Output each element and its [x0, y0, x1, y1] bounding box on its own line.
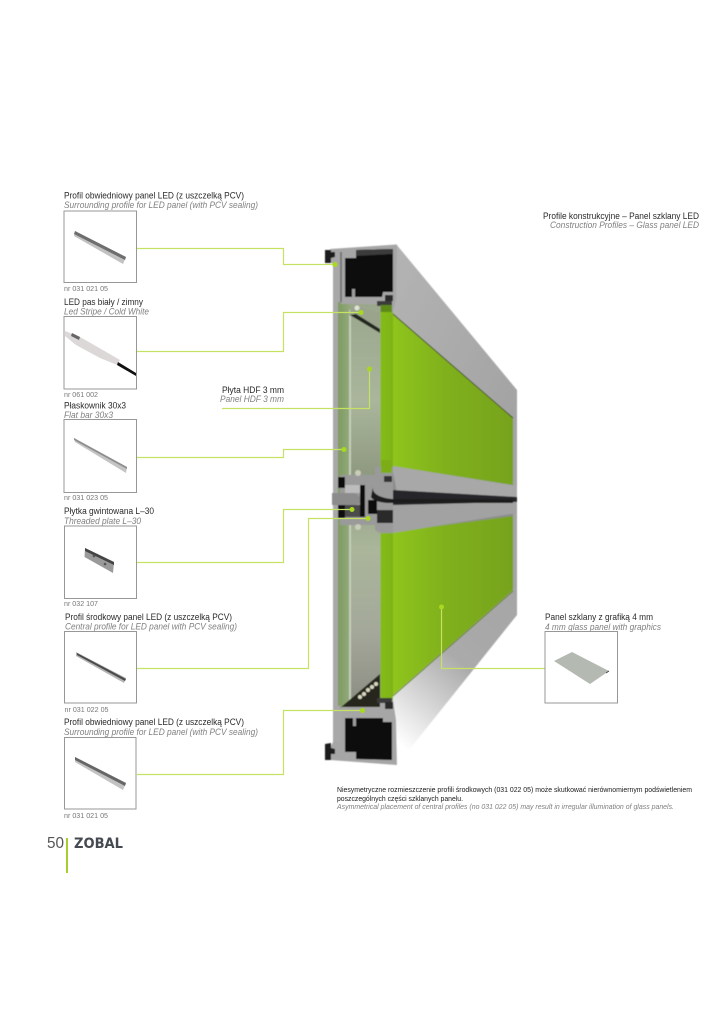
- LED strip shadow top: [349, 306, 380, 333]
- logo: ZOBAL: [74, 836, 123, 852]
- component: LED stripe: [64, 297, 149, 399]
- component: flat bar: Płaskownik 30x3: [64, 400, 126, 410]
- component: LED stripe: nr 061 002: [64, 392, 98, 399]
- note: [336, 787, 692, 811]
- page number: 50: [47, 835, 64, 852]
- page heading: Construction Profiles – Glass panel LED: [550, 220, 699, 230]
- central connector profile: [332, 460, 513, 533]
- component: threaded plate: [64, 506, 154, 608]
- page heading: Profile konstrukcyjne – Panel szklany LED: [543, 211, 699, 221]
- component: surrounding profile bottom: Profil obwiedniowy panel LED (z uszczelką PCV): [64, 717, 244, 727]
- component: flat bar: [64, 400, 136, 502]
- LED strip bottom: [340, 674, 380, 708]
- component: LED stripe: LED pas biały / zimny: [64, 297, 143, 307]
- frame side faces: [392, 244, 517, 765]
- central profile fins: [392, 466, 517, 533]
- leader lines: [137, 248, 545, 774]
- note: Niesymetryczne rozmieszczenie profili środkowych (031 022 05) może skutkować nierównomiernym podświetleniem: [337, 787, 692, 794]
- component: threaded plate: Threaded plate L–30: [64, 516, 141, 526]
- component: central profile: Profil środkowy panel LED (z uszczelką PCV): [65, 612, 232, 622]
- note: Asymmetrical placement of central profiles (no 031 022 05) may result in irregular illumination of glass panels.: [336, 804, 674, 811]
- component: LED stripe: Led Stripe / Cold White: [64, 306, 149, 316]
- note: poszczególnych części szklanych panelu.: [337, 796, 463, 803]
- top profile: [325, 244, 397, 312]
- component: surrounding profile top: Profil obwiedniowy panel LED (z uszczelką PCV): [64, 190, 244, 200]
- label: HDF panel: Panel HDF 3 mm: [220, 394, 284, 404]
- component: threaded plate: nr 032 107: [64, 601, 98, 608]
- panel top shadow line: [393, 314, 513, 418]
- component: surrounding profile bottom: Surrounding profile for LED panel (with PCV sealing): [64, 727, 258, 737]
- glass edge: [380, 305, 393, 473]
- bottom profile: [325, 698, 397, 765]
- label: HDF panel: [220, 385, 284, 404]
- component: central profile: [64, 612, 237, 714]
- component: surrounding profile bottom: [64, 717, 258, 820]
- component: glass panel: 4 mm glass panel with graphics: [545, 622, 661, 632]
- green glass panel upper: [392, 313, 513, 485]
- main cross-section illustration: [325, 244, 517, 765]
- panel bottom shadow line: [393, 591, 513, 696]
- interior of the panel (light box): [333, 264, 381, 742]
- component: surrounding profile bottom: nr 031 021 05: [64, 813, 108, 820]
- component: glass panel: [545, 612, 661, 703]
- component: glass panel: Panel szklany z grafiką 4 mm: [545, 612, 653, 622]
- component: surrounding profile top: Surrounding profile for LED panel (with PCV sealing): [64, 200, 258, 210]
- label: HDF panel: Płyta HDF 3 mm: [222, 385, 284, 395]
- component: flat bar: nr 031 023 05: [64, 495, 108, 502]
- callout dots: [332, 262, 444, 713]
- page heading: [543, 211, 699, 230]
- component: flat bar: Flat bar 30x3: [64, 410, 113, 420]
- component: central profile: nr 031 022 05: [64, 707, 109, 714]
- component: surrounding profile top: [64, 190, 258, 293]
- component: surrounding profile top: nr 031 021 05: [64, 286, 108, 293]
- green glass panel lower: [392, 516, 513, 696]
- accent bar: [66, 838, 68, 873]
- component: central profile: Central profile for LED panel with PCV sealing): [65, 622, 237, 632]
- component: threaded plate: Płytka gwintowana L–30: [64, 506, 154, 516]
